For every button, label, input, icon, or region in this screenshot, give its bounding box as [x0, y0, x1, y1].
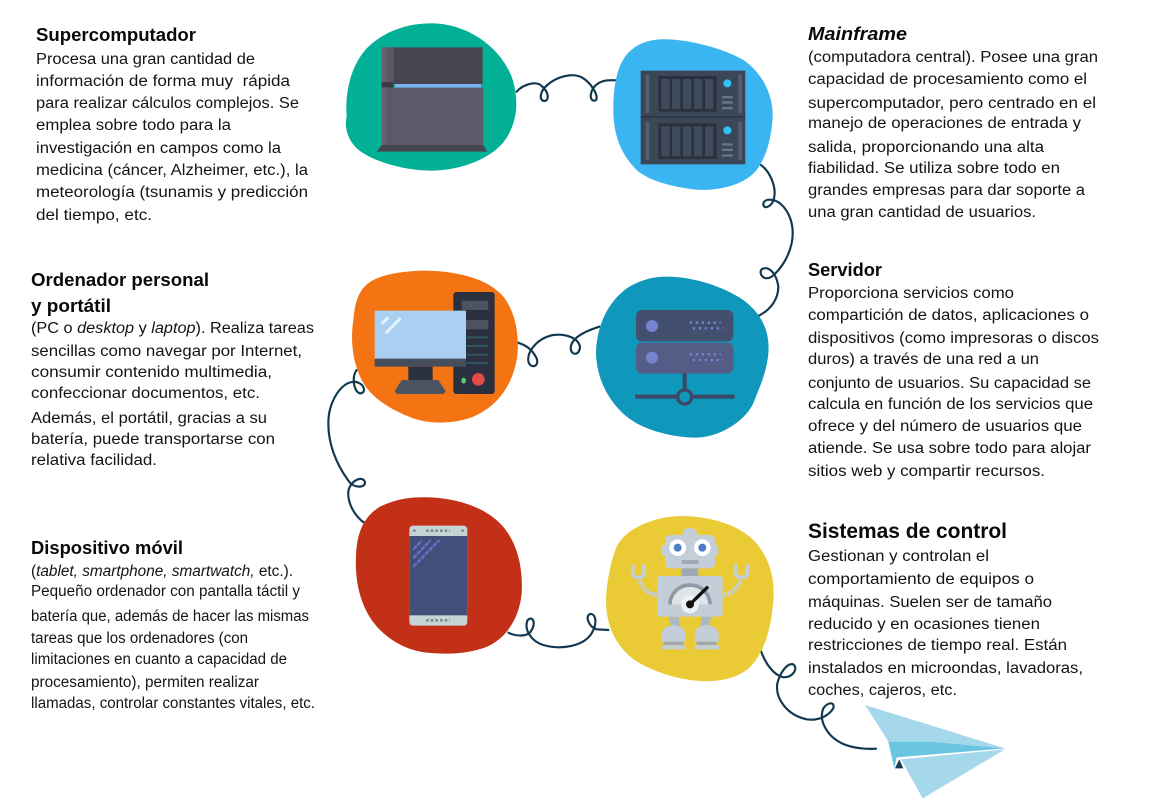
- text block: Servidor: calcula en función de los servicios que: [808, 396, 1093, 413]
- text block: Servidor: duros) a través de una red a un: [808, 351, 1039, 368]
- text block: Sistemas de control: máquinas. Suelen ser de tamaño: [808, 594, 1052, 611]
- text block: Mainframe: manejo de operaciones de entrada y: [808, 115, 1081, 132]
- text block: Dispositivo móvil: limitaciones en cuanto a capacidad de: [31, 651, 287, 668]
- text block: Supercomputador: meteorología (tsunamis y predicción: [36, 184, 308, 201]
- text block: Sistemas de control: Gestionan y controlan el: [808, 548, 989, 565]
- text block: Dispositivo móvil: procesamiento), permiten realizar: [31, 674, 259, 691]
- text block: Dispositivo móvil: (tablet, smartphone, smartwatch, etc.).: [31, 563, 293, 580]
- text block: Ordenador personal y portátil: batería, puede transportarse con: [31, 431, 275, 448]
- icon: paper plane: [865, 705, 1005, 798]
- text block: Dispositivo móvil: batería que, además de hacer las mismas: [31, 608, 309, 625]
- text block: Mainframe: fiabilidad. Se utiliza sobre todo en: [808, 160, 1060, 177]
- heading: Sistemas de control: Sistemas de control: [808, 519, 1007, 543]
- connector: mainframe to servidor: [758, 165, 793, 316]
- text block: Servidor: compartición de datos, aplicaciones o: [808, 307, 1089, 324]
- text block: Supercomputador: información de forma muy rápida: [36, 73, 290, 90]
- text block: Sistemas de control: comportamiento de equipos o: [808, 571, 1034, 588]
- text block: Supercomputador: emplea sobre todo para la: [36, 117, 231, 134]
- text block: Mainframe: supercomputador, pero centrado en el: [808, 95, 1096, 112]
- connector: sistemas de control to paper plane: [760, 648, 876, 749]
- heading: Ordenador personal y portátil: [31, 269, 209, 316]
- text block: Ordenador personal y portátil: sencillas como navegar por Internet,: [31, 343, 302, 360]
- connector: supercomputador to mainframe: [517, 75, 617, 101]
- text block: Servidor: atiende. Se usa sobre todo para alojar: [808, 440, 1091, 457]
- connector: dispositivo to sistemas de control: [508, 614, 608, 647]
- heading: Supercomputador: Supercomputador: [36, 24, 196, 45]
- icon: robot on yellow blob: [606, 516, 774, 681]
- heading: Mainframe: Mainframe: [808, 23, 907, 44]
- heading: Dispositivo móvil: Dispositivo móvil: [31, 537, 183, 558]
- text block: Mainframe: una gran cantidad de usuarios.: [808, 204, 1036, 221]
- text block: Servidor: conjunto de usuarios. Su capacidad se: [808, 375, 1091, 392]
- text block: Servidor: [808, 259, 1099, 480]
- text block: Supercomputador: medicina (cáncer, Alzheimer, etc.), la: [36, 162, 308, 179]
- text block: Sistemas de control: coches, cajeros, etc.: [808, 682, 957, 699]
- icon: network server on dark cyan blob: [596, 277, 769, 438]
- text block: Servidor: dispositivos (como impresoras o discos: [808, 330, 1099, 347]
- text block: Sistemas de control: instalados en microondas, lavadoras,: [808, 660, 1083, 677]
- text block: Sistemas de control: restricciones de tiempo real. Están: [808, 637, 1067, 654]
- text block: Supercomputador: para realizar cálculos complejos. Se: [36, 95, 299, 112]
- text block: Mainframe: salida, proporcionando una alta: [808, 139, 1044, 156]
- text block: Mainframe: capacidad de procesamiento como el: [808, 71, 1087, 88]
- icon: supercomputer on teal blob: [346, 23, 516, 171]
- text block: Supercomputador: investigación en campos como la: [36, 140, 281, 157]
- heading: Servidor: Servidor: [808, 259, 882, 280]
- text block: Supercomputador: Procesa una gran cantidad de: [36, 51, 255, 68]
- text block: Mainframe: (computadora central). Posee una gran: [808, 49, 1098, 66]
- text block: Dispositivo móvil: Pequeño ordenador con pantalla táctil y: [31, 583, 300, 600]
- text block: Ordenador personal y portátil: [31, 269, 314, 469]
- text block: Ordenador personal y portátil: relativa facilidad.: [31, 452, 157, 469]
- heading: Ordenador personal y portátil: Ordenador personal: [31, 269, 209, 290]
- text block: Servidor: ofrece y del número de usuarios que: [808, 418, 1082, 435]
- text block: Mainframe: [808, 23, 1098, 221]
- text block: Servidor: sitios web y compartir recursos.: [808, 463, 1045, 480]
- icon: mainframe on blue blob: [613, 39, 773, 190]
- heading: Ordenador personal y portátil: y portátil: [31, 295, 111, 316]
- text block: Ordenador personal y portátil: consumir contenido multimedia,: [31, 364, 272, 381]
- text block: Sistemas de control: reducido y en ocasiones tienen: [808, 616, 1040, 633]
- text block: Ordenador personal y portátil: confeccionar documentos, etc.: [31, 385, 260, 402]
- text block: Dispositivo móvil: tareas que los ordenadores (con: [31, 630, 248, 647]
- text block: Supercomputador: [36, 24, 308, 224]
- text block: Ordenador personal y portátil: (PC o desktop y laptop). Realiza tareas: [31, 320, 314, 337]
- text block: Dispositivo móvil: llamadas, controlar constantes vitales, etc.: [31, 695, 315, 712]
- connector: servidor to ordenador: [518, 327, 599, 366]
- icon: personal computer on orange blob: [352, 271, 518, 423]
- text block: Dispositivo móvil: [31, 537, 315, 712]
- text block: Ordenador personal y portátil: Además, el portátil, gracias a su: [31, 410, 267, 427]
- icon: mobile device on red blob: [356, 497, 522, 654]
- text block: Supercomputador: del tiempo, etc.: [36, 207, 152, 224]
- text block: Mainframe: grandes empresas para dar soporte a: [808, 182, 1085, 199]
- text block: Sistemas de control: [808, 519, 1083, 699]
- connector: ordenador to dispositivo: [328, 370, 365, 523]
- text block: Servidor: Proporciona servicios como: [808, 285, 1014, 302]
